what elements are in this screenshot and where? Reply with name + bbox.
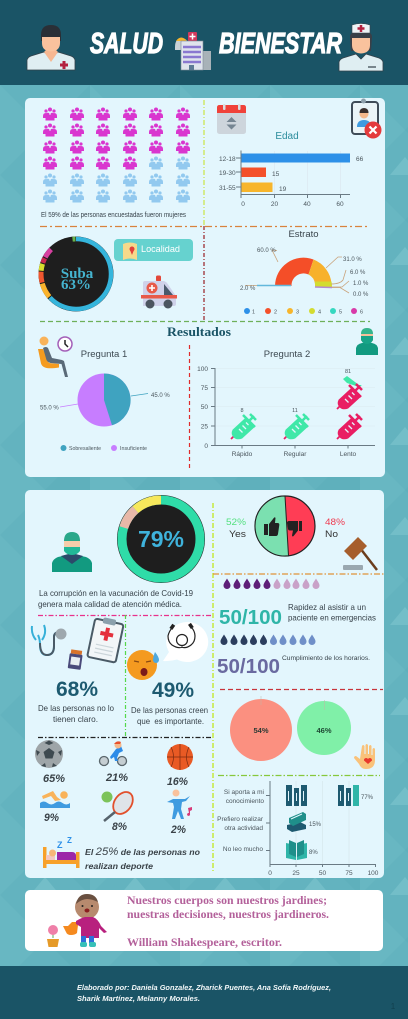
legend: question 1: Sobresaliente <box>69 446 101 452</box>
chart: reading habits: 0 <box>268 870 272 877</box>
text: no sport 25 percent: El 25% de las personas no <box>85 846 200 858</box>
title word: salud: SALUD <box>90 28 163 60</box>
legend: stratum: 5 <box>339 310 342 316</box>
chart: reading habits: 50 <box>319 870 326 877</box>
icon: child gardener <box>75 894 107 947</box>
stat: 68 percent <box>38 678 114 724</box>
semi donut: stratum: 60.0 % <box>257 248 276 254</box>
icon: book stack <box>287 812 322 832</box>
rating: punctuality: 50/100 <box>217 655 280 678</box>
header band <box>0 0 408 85</box>
text: corruption statement <box>38 588 193 609</box>
chart: reading habits: Si aporta a mi <box>224 789 264 796</box>
pie: yes no <box>226 496 345 556</box>
quote text: William Shakespeare, escritor. <box>127 935 282 949</box>
legend: stratum: 6 <box>360 310 363 316</box>
pictogram chart: question 2: 8 <box>240 408 244 414</box>
legend: stratum: 3 <box>296 310 299 316</box>
icon: medical clipboard <box>87 616 124 663</box>
page number: 1 <box>391 1002 396 1011</box>
chart: reading habits: 25 <box>292 870 300 877</box>
sports: dancing <box>167 790 192 836</box>
credits: Elaborado por: Daniela Gonzalez, Zharick Puentes, Ana Sofía Rodríguez, <box>77 983 331 992</box>
icon: calendar <box>217 104 246 134</box>
sports: soccer <box>35 740 65 785</box>
quote text: Nuestros cuerpos son nuestros jardines; <box>127 893 327 907</box>
pictogram chart: question 2 <box>197 366 375 458</box>
pictogram chart: question 2: Lento <box>340 451 357 458</box>
credits: Sharik Martínez, Melanny Morales. <box>77 994 200 1003</box>
panel: corruption and attention <box>25 490 385 878</box>
bar chart: age: 20 <box>271 201 278 208</box>
syringes: lento <box>337 376 362 439</box>
pictogram chart: question 2: 11 <box>292 408 298 414</box>
semi donut: stratum <box>240 248 369 298</box>
semi donut: stratum: 1.0 % <box>353 281 369 287</box>
sports: swimming <box>40 791 70 824</box>
text: corruption statement: La corrupción en la vacunación de Covid-19 <box>39 588 193 598</box>
legend: stratum <box>244 308 363 316</box>
icon: sleeping bed <box>43 836 80 868</box>
donut: locality: Suba <box>61 266 94 282</box>
chart: reading habits: otra actividad <box>224 825 263 832</box>
syringe: rapido <box>231 414 256 439</box>
pie: yes no: Yes <box>229 529 246 540</box>
legend: stratum: 1 <box>252 310 255 316</box>
pie: yes no: 48% <box>325 517 345 527</box>
legend: question 1 <box>60 445 147 452</box>
icon: person waiting <box>38 336 72 377</box>
quote text: nuestras decisiones, nuestros jardineros. <box>127 907 329 921</box>
chart: reading habits <box>217 781 379 877</box>
text: no sport 25 percent <box>85 846 200 871</box>
pie chart: question 1: 45.0 % <box>151 393 170 399</box>
icon: sleeping bed: Z <box>57 840 63 850</box>
pictogram chart: question 2: 25 <box>201 424 208 430</box>
chart: reading habits: 75 <box>345 870 353 877</box>
credits <box>77 983 331 1003</box>
pies: 54 and 46 percent: 54% <box>253 726 269 735</box>
sports: soccer: 65% <box>43 773 65 785</box>
icon: thumb up <box>264 517 279 536</box>
bar chart: age: 40 <box>303 201 311 208</box>
pie: yes no: No <box>325 529 338 540</box>
sports: dancing: 2% <box>170 824 186 836</box>
icon: stethoscope <box>32 625 66 655</box>
icon: book stack: 15% <box>309 822 322 828</box>
caption: women share: El 59% de las personas encuestadas fueron mujeres <box>41 212 186 219</box>
icon: nurse <box>339 24 383 71</box>
title word: bienestar: BIENESTAR <box>219 28 342 60</box>
bar chart: age: 0 <box>241 201 245 208</box>
icon: hospital <box>175 32 211 70</box>
chart: reading habits: conocimiento <box>226 798 264 805</box>
pies: 54 and 46 percent <box>230 696 351 761</box>
icon: open book: 8% <box>309 850 318 856</box>
bar chart: age: 19-30 <box>219 170 236 177</box>
pictogram chart: question 2: 50 <box>201 404 208 411</box>
icon: worried emoji <box>127 650 159 680</box>
semi donut: stratum: 0.0 % <box>353 292 369 298</box>
icon: male doctor <box>27 25 75 70</box>
bar chart: age: 60 <box>336 201 344 208</box>
stat: 68 percent: 68% <box>56 678 98 701</box>
donut: locality <box>38 236 114 312</box>
stat: 49 percent <box>131 679 208 726</box>
bar chart: age: 19 <box>279 186 287 193</box>
chart: reading habits: Prefiero realizar <box>217 816 264 823</box>
icon: gavel <box>343 537 377 570</box>
pictogram: 59% women <box>43 108 190 202</box>
pies: 54 and 46 percent: 46% <box>316 726 332 735</box>
sports: cycling: 21% <box>105 772 128 784</box>
pictogram chart: question 2: Rápido <box>232 451 253 458</box>
icon: sleeping bed: Z <box>67 836 72 845</box>
donut: 79 percent <box>117 495 205 583</box>
rating: punctuality <box>217 634 370 678</box>
icon: open book <box>286 840 318 860</box>
stat: 49 percent: que es importante. <box>137 716 204 726</box>
text: corruption statement: genera mala calidad de atención médica. <box>38 599 182 609</box>
icon: clipboard cancel <box>352 98 382 138</box>
rating: emergency speed: 50/100 <box>219 606 282 629</box>
chart title: question 2: Pregunta 2 <box>264 349 310 360</box>
sports: cycling <box>100 741 128 784</box>
rating: emergency speed <box>219 578 376 629</box>
sports: swimming: 9% <box>44 812 59 824</box>
pictogram chart: question 2: 100 <box>197 366 208 373</box>
chart title: question 1: Pregunta 1 <box>81 349 127 360</box>
footer band <box>0 966 408 1019</box>
pictogram chart: question 2: 75 <box>201 385 208 392</box>
legend: stratum: 4 <box>318 310 321 316</box>
chart title: age: Edad <box>275 131 299 142</box>
bar chart: age: 12-18 <box>219 156 236 163</box>
stat: 68 percent: De las personas no lo <box>38 703 114 713</box>
bar chart: age: 31-55 <box>219 185 236 192</box>
bar chart: age <box>219 150 364 208</box>
sports: basketball <box>167 744 193 788</box>
icon: nurse with mask <box>356 328 378 355</box>
sports: tennis <box>102 788 137 833</box>
icon: flower pot <box>47 925 59 947</box>
syringe: regular <box>284 414 309 439</box>
icon: books row <box>286 785 374 806</box>
pictogram chart: question 2: 81 <box>345 369 351 375</box>
pictogram chart: question 2: Regular <box>284 451 307 458</box>
chart: reading habits: 100 <box>368 870 379 877</box>
rating: emergency speed: Rapidez al asistir a un <box>288 602 366 612</box>
speech bubble: earphones <box>163 622 208 662</box>
stat: 49 percent: De las personas creen <box>131 705 208 715</box>
icon: books row: 77% <box>361 795 374 801</box>
sports: basketball: 16% <box>167 776 188 788</box>
icon: watering can <box>63 922 78 935</box>
icon: ambulance <box>141 276 177 308</box>
rating: emergency speed: paciente en emergencias <box>288 612 376 622</box>
button: locality <box>114 239 193 261</box>
pictogram chart: question 2: 0 <box>204 443 208 450</box>
donut: 79 percent: 79% <box>138 526 184 552</box>
chart: reading habits: No leo mucho <box>223 846 263 853</box>
quote text <box>127 893 329 949</box>
panel: survey demographics <box>25 98 385 477</box>
icon: thumb down <box>287 521 302 536</box>
panel: quote <box>25 890 383 951</box>
chart title: socioeconomic stratum: Estrato <box>288 229 319 240</box>
sports: tennis: 8% <box>112 821 127 833</box>
icon: doctor in mask <box>52 532 92 572</box>
heading: results: Resultados <box>167 325 231 339</box>
pie: yes no: 52% <box>226 517 246 527</box>
bar chart: age: 15 <box>272 171 280 178</box>
stat: 49 percent: 49% <box>152 679 194 702</box>
semi donut: stratum: 6.0 % <box>350 270 366 276</box>
stat: 68 percent: tienen claro. <box>53 714 98 724</box>
bar chart: age: 66 <box>356 156 364 163</box>
text: no sport 25 percent: realizan deporte <box>85 861 153 871</box>
pie chart: question 1: 55.0 % <box>40 406 59 412</box>
icon: hand with heart <box>354 744 375 769</box>
rating: punctuality: Cumplimiento de los horarios. <box>282 655 370 662</box>
legend: stratum: 2 <box>274 310 277 316</box>
legend: question 1: Insuficiente <box>120 446 147 452</box>
button: locality: Localidad <box>141 244 180 255</box>
icon: medicine bottle <box>68 649 83 670</box>
semi donut: stratum: 31.0 % <box>343 257 362 263</box>
semi donut: stratum: 2.0 % <box>240 286 256 292</box>
pie chart: question 1 <box>40 373 170 426</box>
donut: locality: 63% <box>61 277 91 293</box>
